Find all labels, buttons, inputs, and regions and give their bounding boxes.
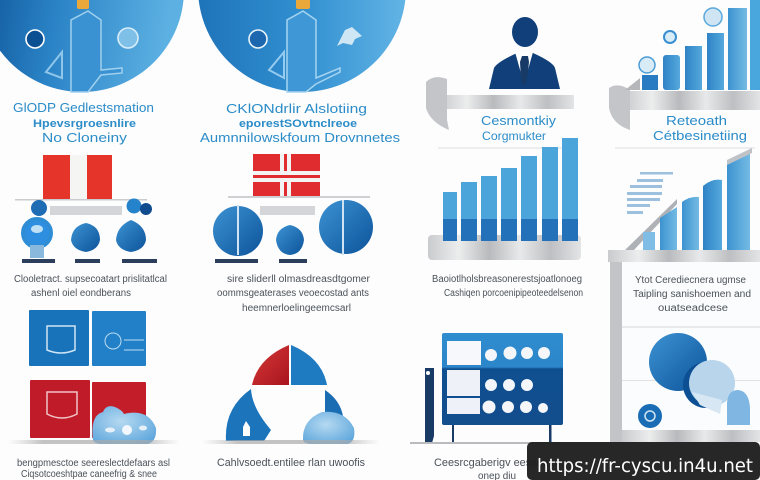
shelf: [440, 95, 574, 109]
text block: frame caption: Ytot Cerediecnera ugmse: [635, 275, 746, 286]
heading: column 2: Aumnnilowskfoum Drovnnetes: [200, 130, 401, 145]
heading: column 1: GlODP Gedlestsmation: [13, 100, 154, 115]
icon: bubble tail: [692, 392, 722, 414]
icon: centre bowl: [276, 225, 304, 255]
blue tile right: [92, 311, 146, 366]
text block: column 3 lower caption: Ceesrcgaberigv eesseatun: [434, 457, 564, 469]
panel: second blue circle: [198, 0, 406, 92]
text block: frame caption: ouatseadcese: [658, 303, 728, 314]
icon: left bowl: [71, 223, 100, 252]
icon: house: [243, 421, 250, 436]
text block: column 1 lower caption: Ciqsotcoeshtpae caneefrig & snee: [21, 469, 157, 480]
text block: column 1 caption: Clooletract. supsecoatart prislitatlcal: [14, 274, 167, 285]
text block: column 2 caption: [217, 274, 371, 314]
text block: column 2 lower caption: Cahlvsoedt.entilee rlan uwoofis: [217, 457, 365, 469]
icon: drop outline: [269, 52, 284, 78]
blue tile left: [29, 310, 89, 366]
lower left lobe: [226, 389, 271, 441]
icon: left badge: [249, 30, 267, 48]
heading: column 2: CKlONdrlir Alslotiing: [226, 101, 367, 116]
icon: right badge: [118, 28, 138, 48]
panel: pie-like diagram column 2: [226, 345, 354, 444]
icon: ring badge: [23, 219, 51, 247]
red quarter: [252, 345, 289, 385]
text block: column 2 caption: oommsgeaterases veoecostad ants: [217, 288, 369, 299]
panel: blue board: [410, 333, 563, 444]
text block: column 3 caption: Baoiotlholsbreasonerestsjoatlonoeg: [432, 274, 582, 285]
icon rows: [482, 346, 550, 414]
icon: bird shape: [337, 27, 362, 46]
icon: glossy cloud blob: [92, 406, 156, 444]
heading: column 4: Reteoath: [666, 113, 727, 128]
icon: gold tag: [77, 0, 89, 9]
text block: column 1 caption: [14, 274, 167, 299]
icon: right bowl: [116, 220, 146, 252]
watermark bar: https://fr-cyscu.in4u.net: [537, 455, 753, 477]
text block: column 2 caption: sire sliderll olmasdreasdtgomer: [227, 274, 371, 285]
text block: column 1 caption: ashenl oiel eondberans: [31, 288, 131, 299]
text block: column 2 caption: heemnerloelingeemcsarl: [242, 303, 351, 314]
icon: gold tag: [296, 0, 310, 9]
text block: column 3 lower caption: [434, 457, 564, 480]
blue quarter: [291, 345, 327, 385]
bar chart: top right on shelf: [609, 0, 760, 130]
panel: person on shelf: [426, 17, 574, 130]
icon: light bubble: [689, 360, 735, 406]
heading: column 2: [200, 101, 401, 145]
text block: column 3 caption: [432, 274, 583, 299]
heading: column 3: [481, 113, 557, 143]
panel: pictogram frame lower right: [610, 262, 760, 442]
icon: cloud: [303, 412, 354, 444]
icon: bubble dark ring: [683, 362, 729, 408]
heading: column 4: Cétbesinetiing: [653, 128, 747, 143]
heading: column 1: No Cloneiny: [42, 130, 128, 145]
red tile right: [92, 382, 146, 438]
text block: frame caption: [633, 275, 751, 314]
icon: tower: [71, 11, 122, 92]
text block: frame caption: Taipling sanishoemen and: [633, 289, 751, 300]
icon: large blue circle: [649, 333, 707, 391]
panel: flag display column 2: [213, 154, 373, 263]
icon: small bubble: [727, 390, 750, 425]
heading: column 3: Corgmukter: [482, 129, 546, 143]
heading: column 1: [13, 100, 154, 145]
heading: column 2: eporestSOvtnclreoe: [239, 118, 357, 130]
icon: left badge: [26, 30, 44, 48]
icon: person silhouette: [489, 17, 560, 89]
heading: column 1: Hpevsrgroesnlire: [33, 118, 136, 130]
bar chart: column 3: [428, 138, 581, 260]
panel: top-left blue circle: [0, 0, 184, 92]
flag: [43, 155, 112, 199]
text block: column 1 lower caption: bengpmesctoe seereslectdefaars asl: [17, 458, 170, 469]
white rows: [447, 341, 481, 365]
shelf: [625, 91, 760, 110]
icon: tower: [287, 11, 340, 92]
panel: square tiles column 1: [29, 310, 156, 444]
icon: left ball: [213, 206, 263, 256]
red tile left: [30, 380, 90, 438]
text block: column 3 caption: Cashiqen porcoenipipeoteedelsenon: [444, 288, 583, 299]
icon: arrow outline: [46, 52, 62, 78]
icon: striped ball: [627, 172, 673, 214]
heading: column 3: Cesmontkiy: [481, 113, 557, 128]
heading: column 4: [653, 113, 747, 143]
icon: phone badge: [638, 404, 662, 428]
bar chart: lower right with roof: [608, 148, 760, 262]
board: [442, 333, 563, 425]
watermark bar: [527, 442, 760, 480]
text block: column 1 lower caption: [17, 458, 170, 480]
panel: flag display column 1: [15, 155, 157, 263]
flag: [253, 154, 320, 198]
lower right lobe: [325, 390, 343, 420]
icon: right ball: [319, 200, 373, 254]
